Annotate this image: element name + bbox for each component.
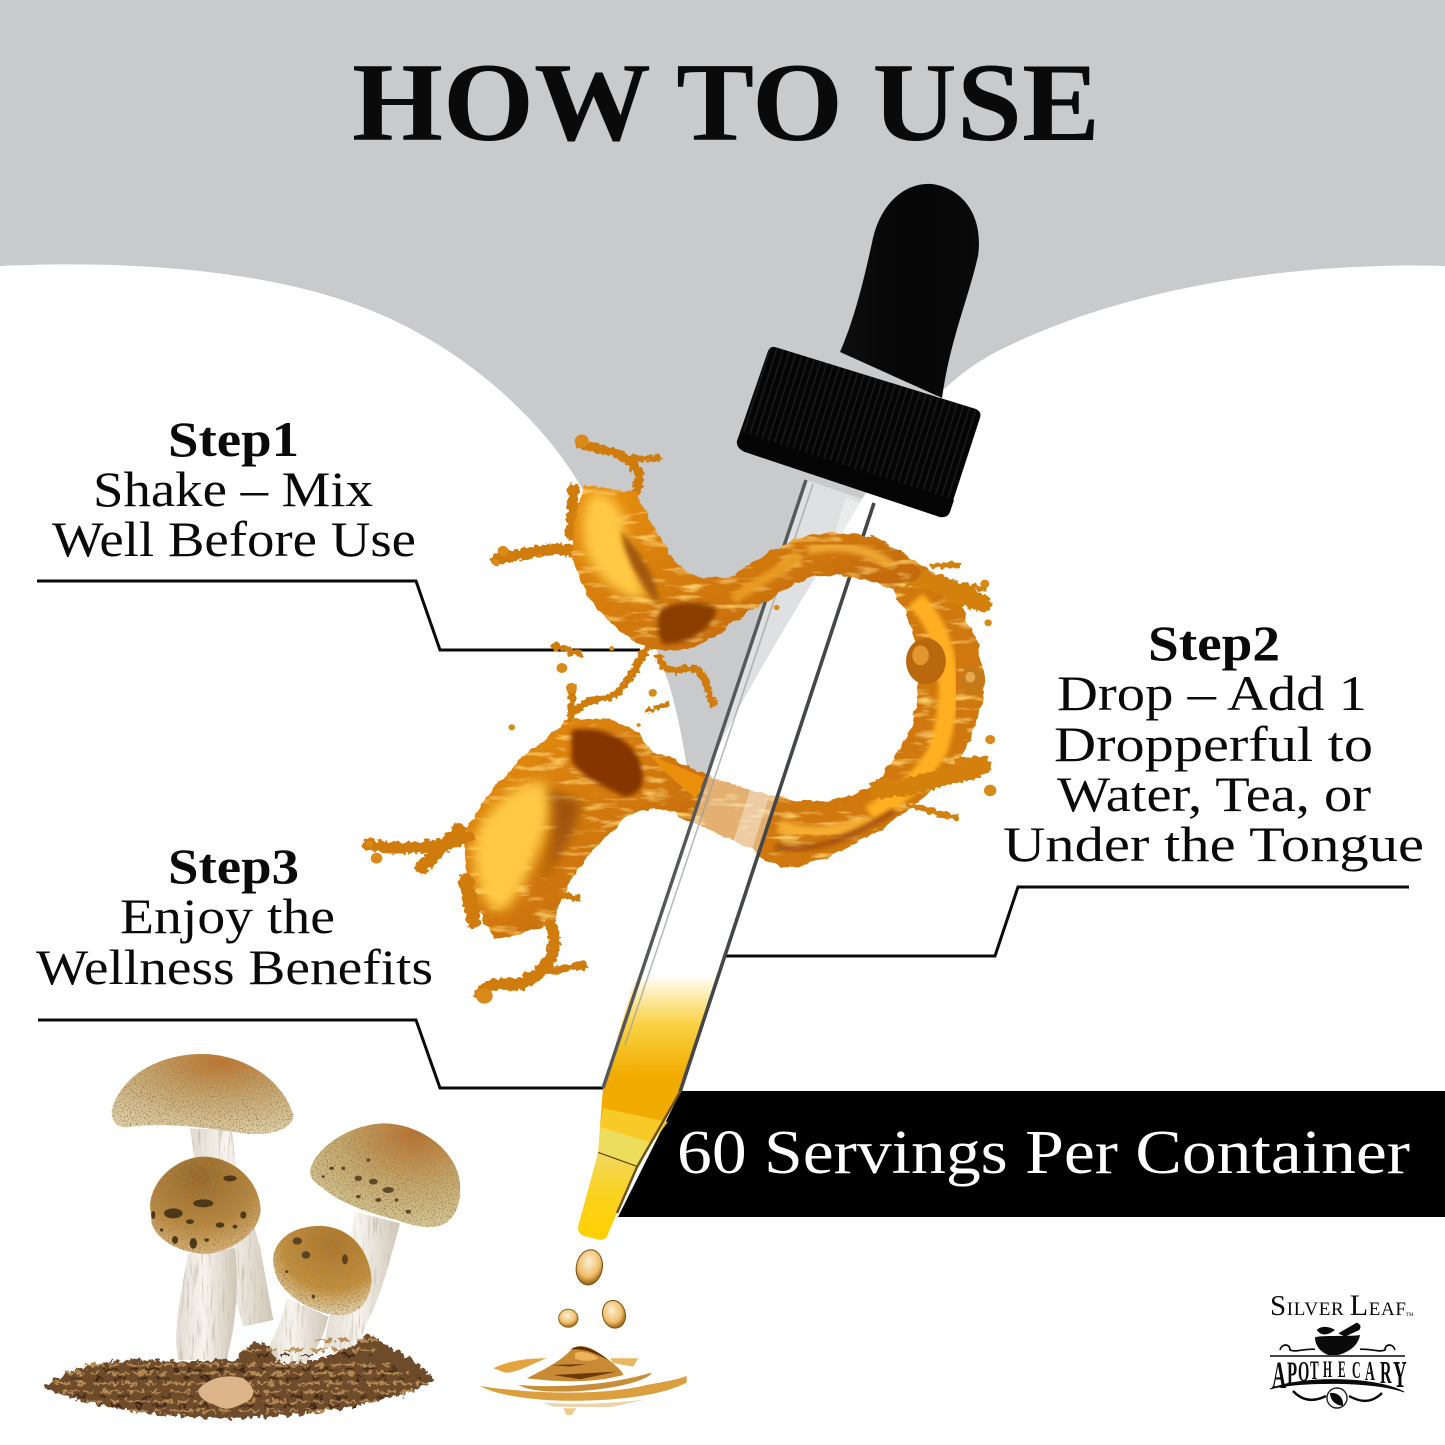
- oil bubbles on ring: [906, 638, 985, 695]
- loose droplets: [365, 435, 780, 1004]
- apothecary wordmark: Y: [1393, 1354, 1407, 1396]
- clear glass body: [603, 480, 874, 1092]
- lower blob shading: [473, 729, 704, 911]
- oil fill in the tube: [600, 975, 716, 1143]
- back mushroom stem: [190, 1128, 273, 1327]
- white right curved area: [690, 266, 1445, 1445]
- apothecary wordmark: C: [1352, 1358, 1361, 1384]
- oil shoulder stripe: [600, 1108, 668, 1143]
- large drop: [573, 1248, 605, 1287]
- step 2 text block: Step2: [1148, 615, 1280, 671]
- glass dropper tube: [578, 480, 874, 1240]
- step 1 leader line: [37, 581, 640, 650]
- upper wave shading: [583, 493, 891, 644]
- small front mushroom stem: [263, 1298, 328, 1368]
- white left curved area: [0, 264, 692, 1445]
- lower emblem: [1270, 1380, 1404, 1408]
- ribbed screw cap: [737, 347, 980, 517]
- moss ground: [43, 1333, 435, 1418]
- apothecary wordmark: T: [1310, 1357, 1319, 1385]
- middle mushroom cap: [150, 1157, 261, 1254]
- step 3 text block: Step3: [168, 838, 299, 894]
- soft inner reflection: [668, 498, 864, 1040]
- cap bottom lip: [737, 432, 954, 517]
- ring droplets: [980, 580, 996, 796]
- oil splash: upper wave (in front of the glass): [365, 435, 924, 1004]
- step 2 text block: Under the Tongue: [1003, 816, 1424, 872]
- medium drop: [599, 1298, 629, 1331]
- dried flower on moss: [198, 1376, 253, 1409]
- tendrils and splatter: [368, 443, 712, 994]
- apothecary wordmark: P: [1287, 1355, 1297, 1392]
- apothecary wordmark: A: [1365, 1356, 1375, 1386]
- puddle splash: [480, 1346, 687, 1415]
- middle cap speckles: [151, 1175, 246, 1249]
- step 1 text block: Well Before Use: [52, 511, 416, 567]
- apothecary wordmark: E: [1338, 1357, 1346, 1382]
- spray on the ring: [878, 565, 986, 818]
- step 1 text block: [52, 411, 416, 567]
- upper splash wave body: [572, 485, 924, 651]
- step 1 text block: Shake – Mix: [93, 461, 373, 517]
- right glass edge: [680, 503, 874, 1092]
- step 3 text block: Wellness Benefits: [36, 939, 433, 995]
- servings text: 60 Servings Per Container: [677, 1119, 1410, 1187]
- oil splash: lower blob and ring (behind the glass): [464, 535, 996, 939]
- mortar and pestle icon: [1280, 1323, 1395, 1355]
- title: HOW TO USE: [352, 41, 1100, 165]
- mushroom cluster illustration: [43, 1054, 460, 1418]
- dropper tip with oil: [578, 1153, 637, 1240]
- right cap speckles: [322, 1158, 411, 1214]
- ring shading: [775, 600, 948, 849]
- step 1 text block: Step1: [168, 411, 299, 467]
- step 2 leader line: [725, 887, 1409, 956]
- small cap speckles: [285, 1237, 348, 1299]
- trademark: TM: [1406, 1313, 1414, 1318]
- step 3 leader line: [38, 1020, 604, 1088]
- glass neck: [598, 1127, 652, 1167]
- falling drops and puddle: [480, 1248, 687, 1415]
- left glass edge: [603, 480, 806, 1088]
- step 2 text block: Water, Tea, or: [1057, 766, 1371, 822]
- apothecary wordmark: H: [1323, 1357, 1332, 1382]
- right tip edge: [617, 1092, 680, 1213]
- front-left mushroom stem: [176, 1248, 237, 1360]
- apothecary wordmark: O: [1298, 1356, 1309, 1387]
- step 2 text block: Drop – Add 1: [1057, 665, 1367, 721]
- brand name: SILVER LEAF: [1270, 1289, 1406, 1322]
- right back mushroom stem: [323, 1212, 400, 1350]
- ring band: [692, 535, 984, 868]
- neck ring: [598, 1153, 637, 1167]
- Silver Leaf Apothecary logo: [1270, 1289, 1414, 1408]
- top-left mushroom cap: [112, 1054, 293, 1134]
- step 3 text block: [36, 838, 433, 995]
- black servings banner: [618, 1091, 1445, 1217]
- small drop: [559, 1309, 578, 1327]
- step 3 text block: Enjoy the: [120, 888, 335, 944]
- small front mushroom cap: [273, 1226, 372, 1315]
- rubber bulb: [840, 184, 979, 398]
- apothecary wordmark: A: [1272, 1354, 1287, 1397]
- step 2 text block: Dropperful to: [1054, 716, 1373, 772]
- lower splash blob: [464, 718, 712, 939]
- ornament divider: [1270, 1355, 1405, 1357]
- dropper cap and bulb: [737, 184, 980, 517]
- step 2 text block: [1003, 615, 1424, 872]
- apothecary wordmark: R: [1380, 1355, 1392, 1391]
- right mushroom cap: [310, 1123, 460, 1227]
